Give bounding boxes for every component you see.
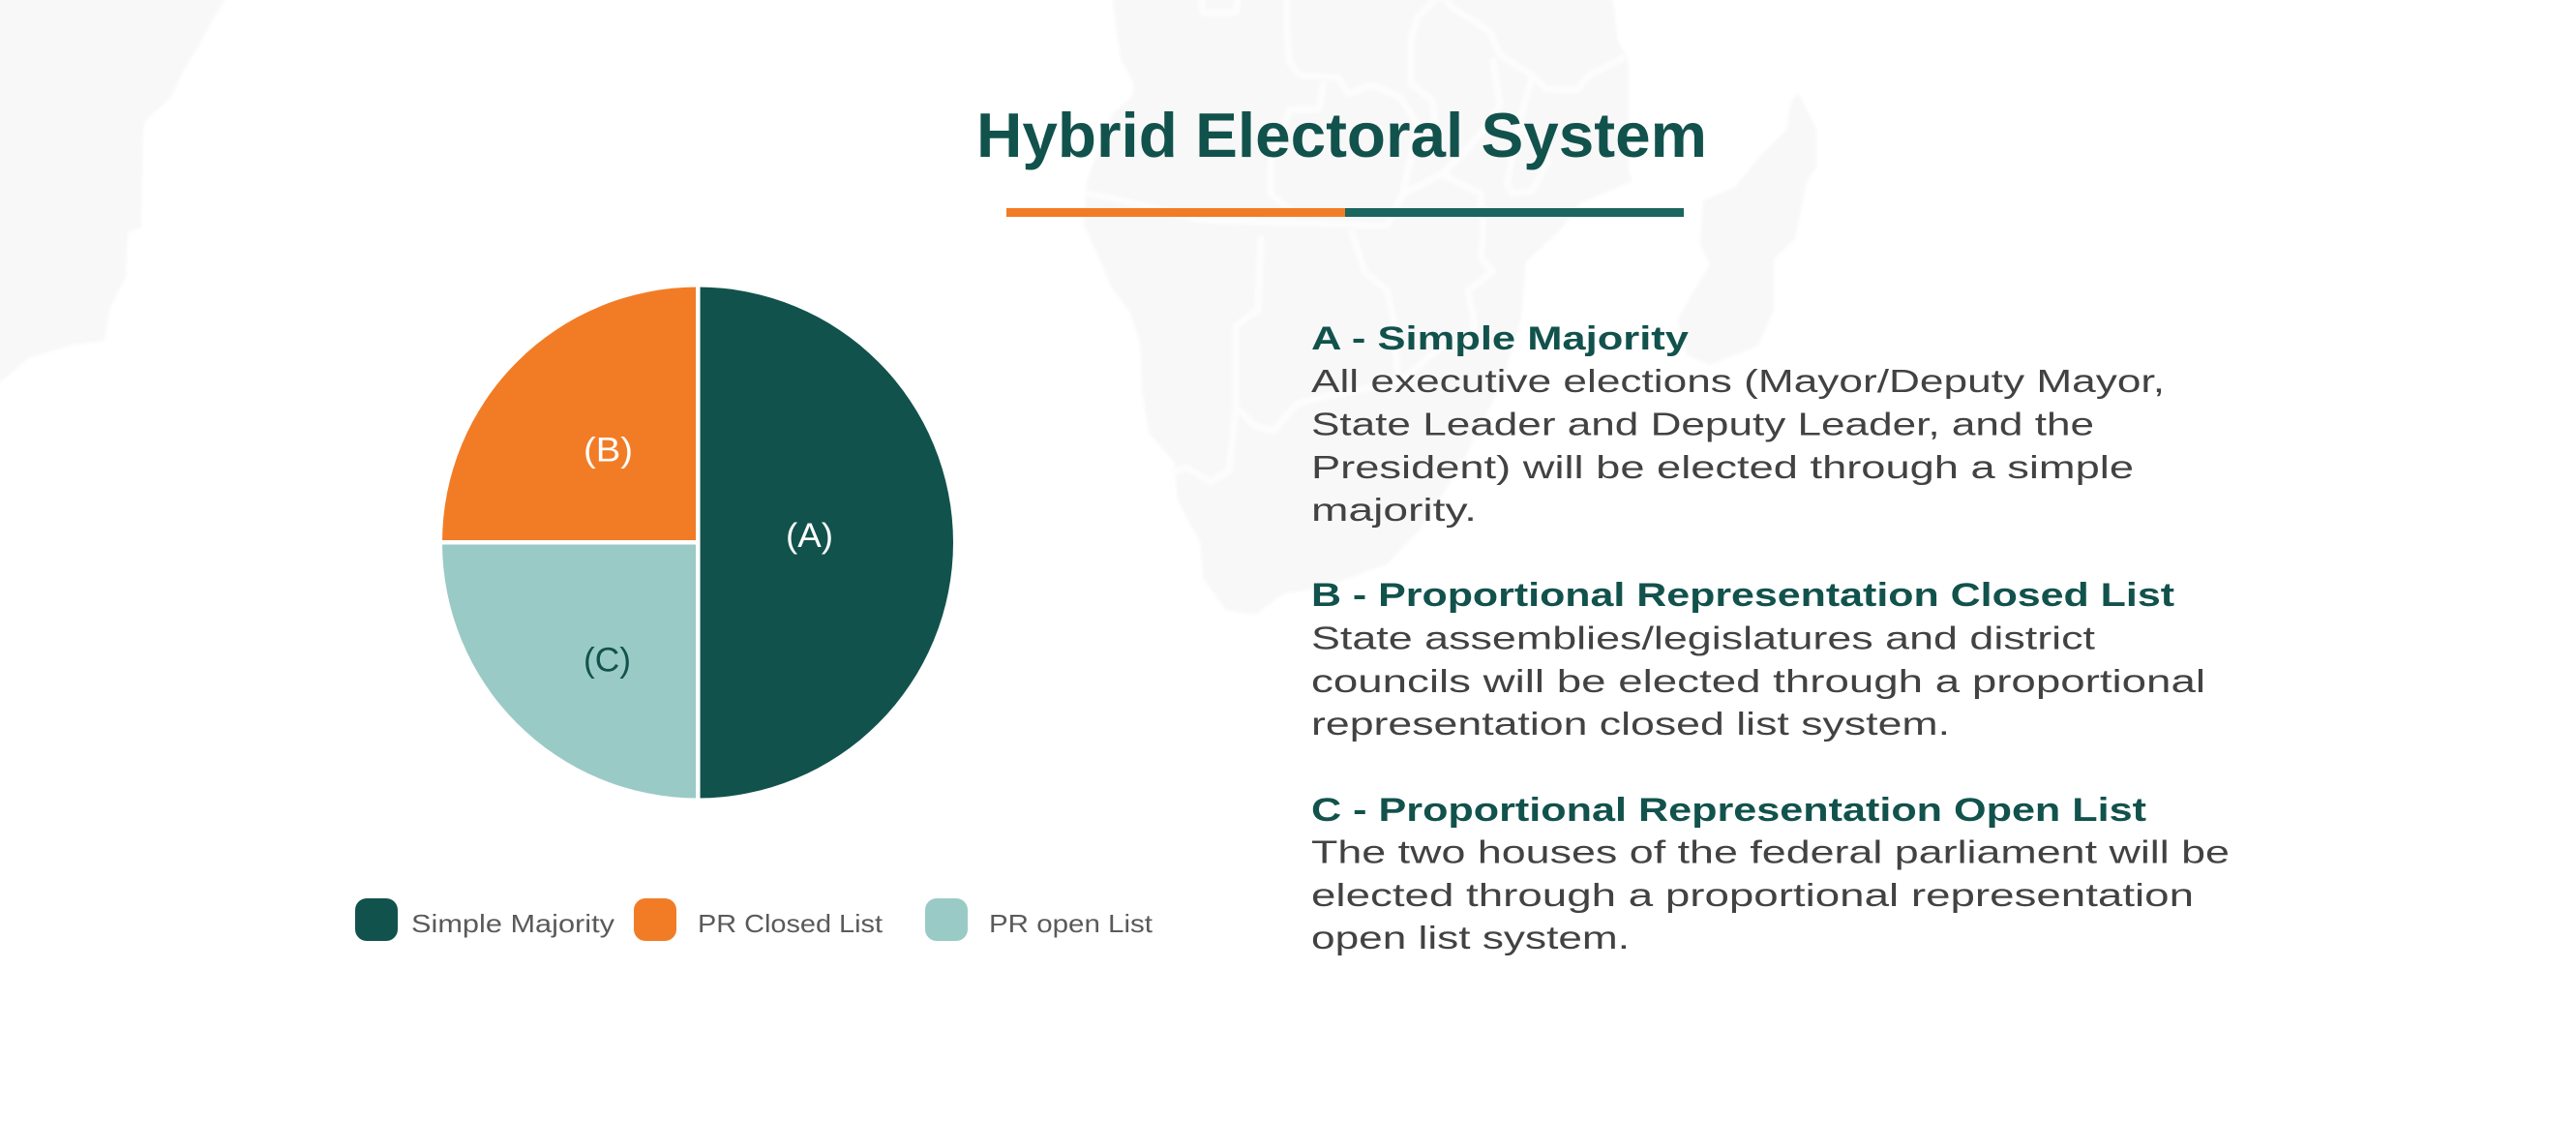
body A: majority. [1311,493,1477,529]
text block C [1311,792,2230,956]
text block B [1311,577,2205,742]
pie chart [435,281,953,803]
body A [1311,364,2165,529]
body A: All executive elections (Mayor/Deputy Mayor, [1311,364,2165,400]
background map [0,0,1816,615]
body A: President) will be elected through a simple [1311,450,2134,486]
title underline [1006,208,1684,217]
pie slice C: PR open list [442,542,698,799]
legend label: PR closed list: PR Closed List [698,909,884,938]
legend label: simple majority: Simple Majority [411,909,614,938]
legend [355,898,1153,941]
pie dividers [435,281,698,803]
body B [1311,621,2205,742]
text block A [1311,320,2165,529]
heading A: A - Simple Majority [1311,320,1689,357]
pie label B: (B) [584,432,633,469]
legend label: PR open list: PR open List [989,909,1153,938]
pie label A: (A) [786,517,833,555]
body C: open list system. [1311,921,1630,956]
legend swatch: simple majority [355,898,398,941]
heading B: B - Proportional Representation Closed List [1311,577,2174,614]
body B: representation closed list system. [1311,707,1950,742]
body B: State assemblies/legislatures and district [1311,621,2096,656]
title: Hybrid Electoral System [976,100,1707,170]
heading C: C - Proportional Representation Open List [1311,792,2146,829]
pie slice A: simple majority [698,287,953,798]
body C: The two houses of the federal parliament will be [1311,834,2230,871]
legend swatch: PR open list [925,898,968,941]
body C: elected through a proportional representation [1311,878,2194,914]
pie slice B: PR closed list [442,287,698,542]
body A: State Leader and Deputy Leader, and the [1311,407,2094,443]
body B: councils will be elected through a proportional [1311,664,2205,700]
pie label C: (C) [584,641,631,680]
body C [1311,834,2230,956]
legend swatch: PR closed list [634,898,676,941]
